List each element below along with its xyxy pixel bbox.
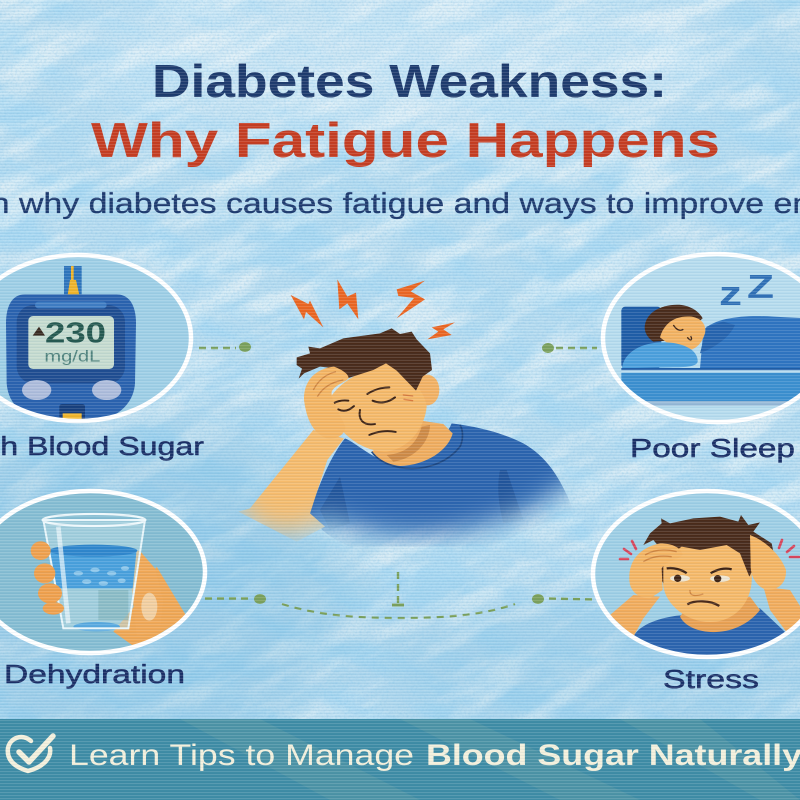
footer text bold: Blood Sugar Naturally [426, 739, 800, 772]
man figure [238, 328, 573, 547]
panel: poor sleep [603, 254, 800, 463]
icon: stress marks [620, 540, 799, 559]
neck [372, 420, 453, 466]
lightning bolts [291, 279, 455, 339]
icon: hand holding glass of water [31, 514, 187, 648]
hand on forehead [304, 367, 349, 439]
label: Poor Sleep [630, 433, 795, 463]
title line 1: Diabetes Weakness: [152, 55, 667, 107]
arm [238, 430, 344, 542]
label: Dehydration [4, 659, 185, 689]
label: Stress [663, 664, 759, 694]
footer banner [0, 719, 800, 800]
panel: dehydration [0, 491, 205, 689]
icon: tired man holding head [238, 279, 573, 547]
connector: dehydration and stress [205, 572, 595, 618]
hair [297, 328, 432, 391]
icon: zz [719, 268, 774, 313]
footer text: Learn Tips to Manage [69, 739, 414, 772]
panel: high blood sugar [0, 255, 204, 461]
face [330, 363, 427, 452]
icon: glucose meter: mg/dL [44, 349, 101, 366]
panel: stress [593, 491, 800, 694]
connector: high blood sugar [199, 342, 251, 352]
icon: zz: z [719, 275, 742, 313]
icon: heart check badge [8, 736, 53, 771]
title [91, 55, 720, 168]
icon: zz: Z [747, 268, 774, 305]
shirt [310, 423, 573, 547]
title line 2: Why Fatigue Happens [91, 114, 720, 168]
icon: glucose meter [6, 266, 136, 424]
closed eyes and mouth [333, 387, 413, 435]
ear [415, 375, 439, 405]
icon: sleeping person in bed [621, 305, 800, 406]
icon: stressed man [610, 515, 800, 663]
connector: poor sleep [542, 343, 597, 353]
icon: glucose meter: 230 [45, 318, 106, 350]
